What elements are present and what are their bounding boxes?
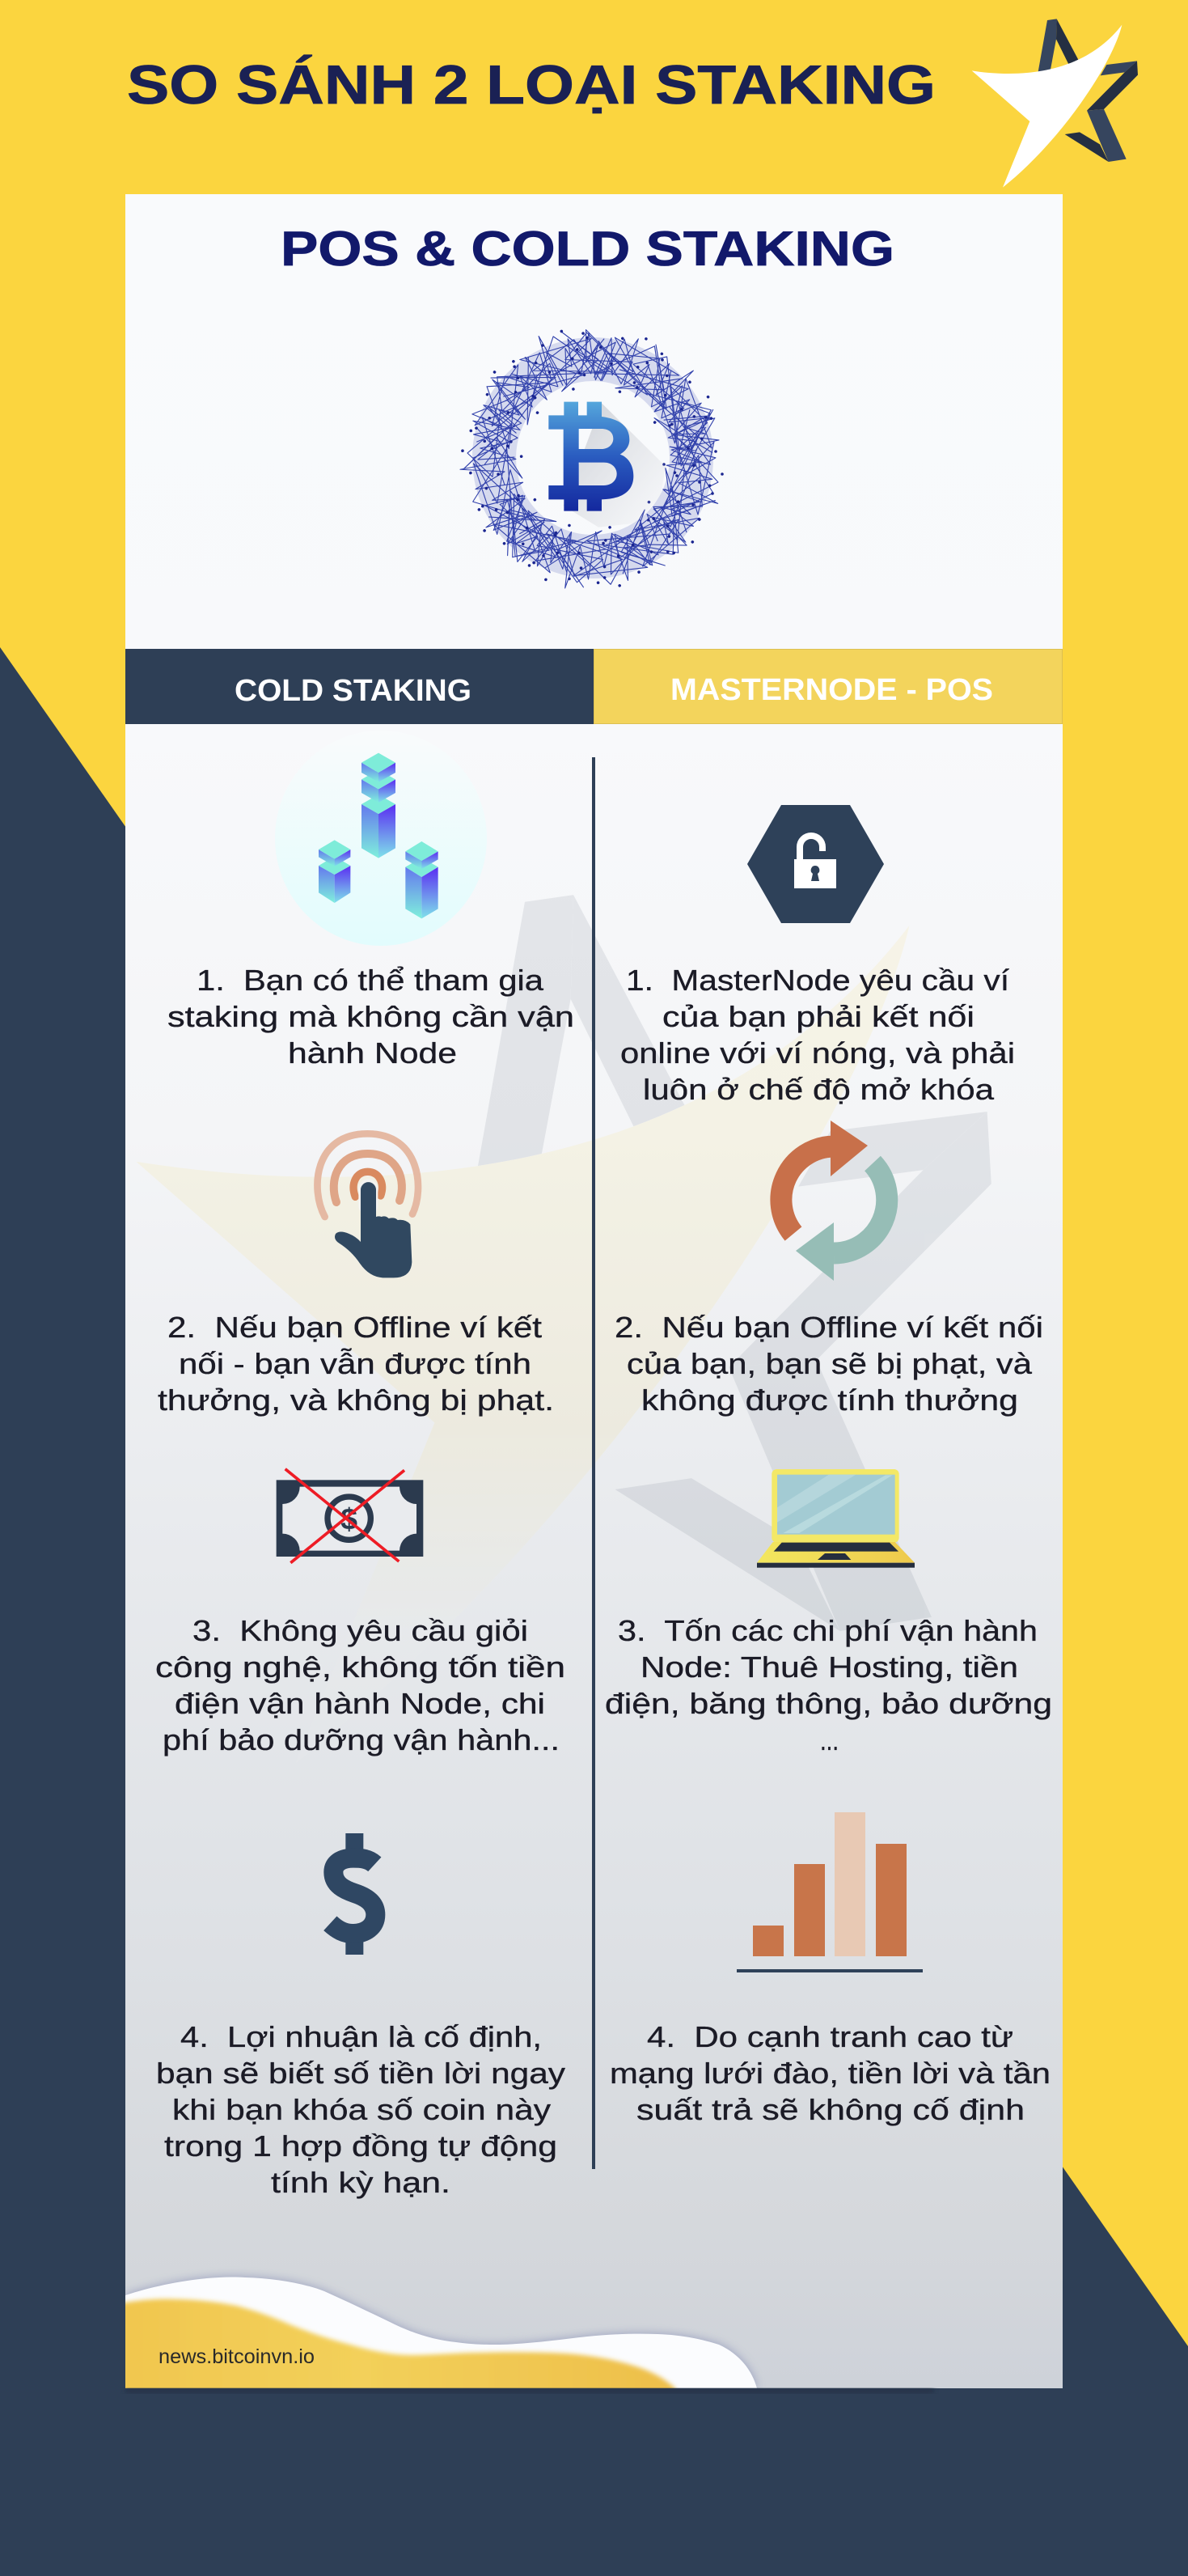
text: cold 4 <box>156 2020 565 2199</box>
text: pos 1 <box>620 964 1015 1106</box>
text: cold 1 <box>167 964 574 1070</box>
header: masternode pos <box>594 649 1063 723</box>
panel background <box>125 194 1063 2388</box>
bitcoin symbol <box>548 402 666 527</box>
text: pos 3: 3. Tốn các chi phí vận hành <box>618 1614 1038 1647</box>
icon: crossed out banknote: $ <box>340 1502 357 1536</box>
text: cold 1: 1. Bạn có thể tham gia <box>197 964 544 997</box>
header: cold staking: COLD STAKING <box>235 674 471 708</box>
text: pos 2: của bạn, bạn sẽ bị phạt, và <box>627 1347 1033 1380</box>
header: cold staking <box>125 649 594 724</box>
icon: laptop <box>757 1469 915 1568</box>
signal arcs <box>317 1133 418 1217</box>
text: cold 2: nối - bạn vẫn được tính <box>179 1347 531 1380</box>
text: cold 2 <box>158 1311 554 1417</box>
icon: bitcoin network ring <box>449 310 735 595</box>
title: SO SÁNH 2 LOẠI STAKING <box>127 54 936 116</box>
footer url: news.bitcoinvn.io <box>159 2345 315 2368</box>
icon: tapping hand <box>317 1133 418 1277</box>
icon: refresh arrows <box>781 1121 887 1281</box>
text: cold 4: bạn sẽ biết số tiền lời ngay <box>156 2057 565 2090</box>
text: pos 2 <box>615 1311 1043 1417</box>
text: pos 4 <box>610 2020 1051 2126</box>
text: cold 1: hành Node <box>288 1036 457 1070</box>
text: pos 3: ... <box>820 1723 839 1756</box>
text: cold 3: 3. Không yêu cầu giỏi <box>192 1614 528 1647</box>
icon: dollar sign <box>330 1833 375 1955</box>
icon: unlocked padlock hexagon <box>747 805 884 923</box>
text: pos 3: điện, băng thông, bảo dưỡng <box>605 1687 1052 1720</box>
icon: crossed out banknote <box>277 1469 423 1563</box>
panel: main card <box>125 194 1063 2388</box>
text: cold 4: tính kỳ hạn. <box>271 2166 450 2199</box>
panel bottom shadow <box>125 2388 934 2393</box>
right tower <box>405 841 438 918</box>
text: pos 1: 1. MasterNode yêu cầu ví <box>626 964 1009 997</box>
text: cold 3: phí bảo dưỡng vận hành... <box>163 1723 560 1756</box>
text: pos 4: mạng lưới đào, tiền lời và tần <box>610 2057 1051 2090</box>
text: cold 3: công nghệ, không tốn tiền <box>155 1650 565 1684</box>
left tower <box>319 840 350 903</box>
text: pos 2: không được tính thưởng <box>641 1383 1018 1417</box>
text: pos 1: online với ví nóng, và phải <box>620 1036 1015 1070</box>
icon: bar chart <box>737 1812 923 1972</box>
icon: star logo <box>972 19 1138 188</box>
hand <box>335 1182 412 1277</box>
text: cold 4: 4. Lợi nhuận là cố định, <box>180 2020 542 2053</box>
text: cold 4: trong 1 hợp đồng tự động <box>164 2129 557 2163</box>
footer wave <box>105 2277 757 2399</box>
text: pos 3: Node: Thuê Hosting, tiền <box>641 1650 1018 1684</box>
text: pos 4: 4. Do cạnh tranh cao từ <box>647 2020 1013 2053</box>
text: pos 1: của bạn phải kết nối <box>662 1000 974 1033</box>
text: pos 4: suất trả sẽ không cố định <box>636 2093 1025 2126</box>
network mesh <box>449 310 735 595</box>
text: cold 1: staking mà không cần vận <box>167 1000 574 1033</box>
heading: POS & COLD STAKING: POS & COLD STAKING <box>281 222 894 276</box>
header: masternode pos: MASTERNODE - POS <box>670 673 993 707</box>
text: cold 3: điện vận hành Node, chi <box>175 1687 545 1720</box>
text: pos 3 <box>605 1614 1052 1756</box>
text: pos 1: luôn ở chế độ mở khóa <box>643 1073 995 1106</box>
column divider <box>592 757 595 2169</box>
icon: blockchain towers <box>275 731 487 946</box>
text: pos 2: 2. Nếu bạn Offline ví kết nối <box>615 1311 1043 1344</box>
text: cold 2: thưởng, và không bị phạt. <box>158 1383 554 1417</box>
text: cold 4: khi bạn khóa số coin này <box>172 2093 551 2126</box>
text: cold 3 <box>155 1614 565 1756</box>
watermark star <box>136 895 991 1763</box>
text: cold 2: 2. Nếu bạn Offline ví kết <box>167 1311 542 1344</box>
center tower <box>361 753 395 858</box>
